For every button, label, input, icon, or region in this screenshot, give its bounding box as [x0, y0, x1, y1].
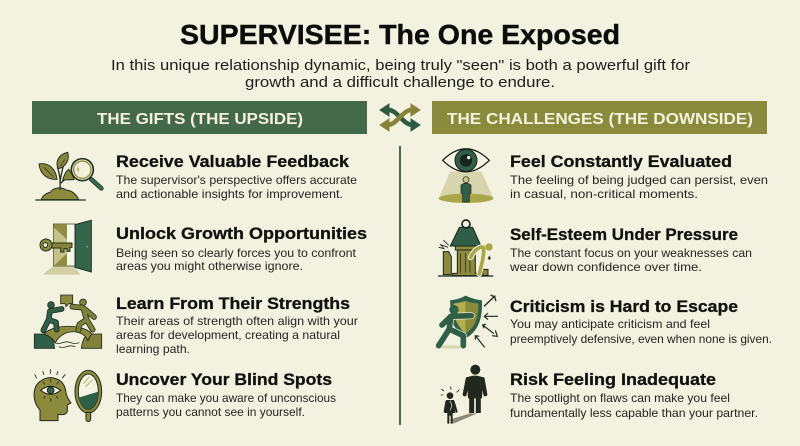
item: uncover your blind spots: [34, 369, 336, 421]
item: criticism is hard to escape: [437, 295, 772, 349]
subtitle: [111, 58, 690, 91]
description: The supervisor's perspective offers accurate: [116, 174, 357, 187]
item: receive valuable feedback: [35, 152, 357, 201]
description: learning path.: [116, 343, 190, 356]
icon: key and open door: [40, 220, 91, 275]
title: SUPERVISEE: The One Exposed: [180, 19, 620, 50]
description: Their areas of strength often align with your: [116, 315, 358, 328]
heading: Uncover Your Blind Spots: [116, 371, 332, 389]
description: You may anticipate criticism and feel: [510, 318, 710, 331]
description: fundamentally less capable than your partner.: [510, 407, 758, 420]
item: feel constantly evaluated: [439, 149, 768, 203]
description: [116, 247, 357, 273]
description: The spotlight on flaws can make you feel: [510, 392, 730, 405]
icon: plant and magnifying glass: [35, 152, 101, 200]
description: [116, 392, 336, 419]
panel heading: the gifts: [32, 101, 367, 134]
item: self-esteem under pressure: [438, 220, 752, 276]
icon: weight crushing pillar: [438, 220, 493, 276]
heading: Risk Feeling Inadequate: [510, 371, 716, 389]
panel heading: the gifts: THE GIFTS (THE UPSIDE): [97, 111, 303, 128]
heading: Receive Valuable Feedback: [116, 153, 350, 171]
panel heading: the challenges: THE CHALLENGES (THE DOWNSIDE): [447, 111, 753, 128]
description: Being seen so clearly forces you to confront: [116, 247, 357, 260]
description: areas you might otherwise ignore.: [116, 260, 303, 273]
panel heading: the challenges: [432, 101, 767, 134]
description: preemptively defensive, even when none is given.: [510, 333, 772, 346]
description: wear down confidence over time.: [509, 261, 702, 274]
icon: two figures on a bridge: [34, 295, 102, 348]
panel: gifts: [34, 152, 367, 421]
icon: figure with shield and arrows: [437, 295, 498, 349]
subtitle: In this unique relationship dynamic, being truly "seen" is both a powerful gift for: [111, 58, 690, 74]
item: unlock growth opportunities: [40, 220, 367, 275]
description: The feeling of being judged can persist, even: [510, 174, 768, 187]
description: [510, 174, 768, 201]
description: patterns you cannot see in yourself.: [116, 406, 305, 419]
item: risk feeling inadequate: [441, 365, 758, 424]
description: [116, 174, 357, 201]
icon: watching eye over person: [439, 149, 493, 203]
description: in casual, non-critical moments.: [510, 188, 698, 201]
heading: Feel Constantly Evaluated: [510, 153, 732, 171]
heading: Criticism is Hard to Escape: [510, 298, 738, 316]
description: The constant focus on your weaknesses can: [510, 247, 752, 260]
heading: Unlock Growth Opportunities: [116, 225, 367, 243]
heading: Self-Esteem Under Pressure: [510, 226, 738, 244]
description: They can make you aware of unconscious: [116, 392, 336, 405]
item: learn from their strengths: [34, 295, 358, 356]
description: areas for development, creating a natural: [116, 329, 340, 342]
icon: small figure beside large figure: [441, 365, 485, 424]
heading: Learn From Their Strengths: [116, 295, 350, 313]
icon: crossing arrows: [380, 104, 420, 131]
description: [510, 318, 772, 346]
description: [510, 392, 758, 420]
description: [116, 315, 358, 356]
icon: head with eye and mirror: [34, 369, 102, 421]
panel: challenges: [437, 149, 772, 424]
description: [509, 247, 752, 274]
subtitle: growth and a difficult challenge to endure.: [245, 75, 555, 91]
description: and actionable insights for improvement.: [116, 188, 343, 201]
